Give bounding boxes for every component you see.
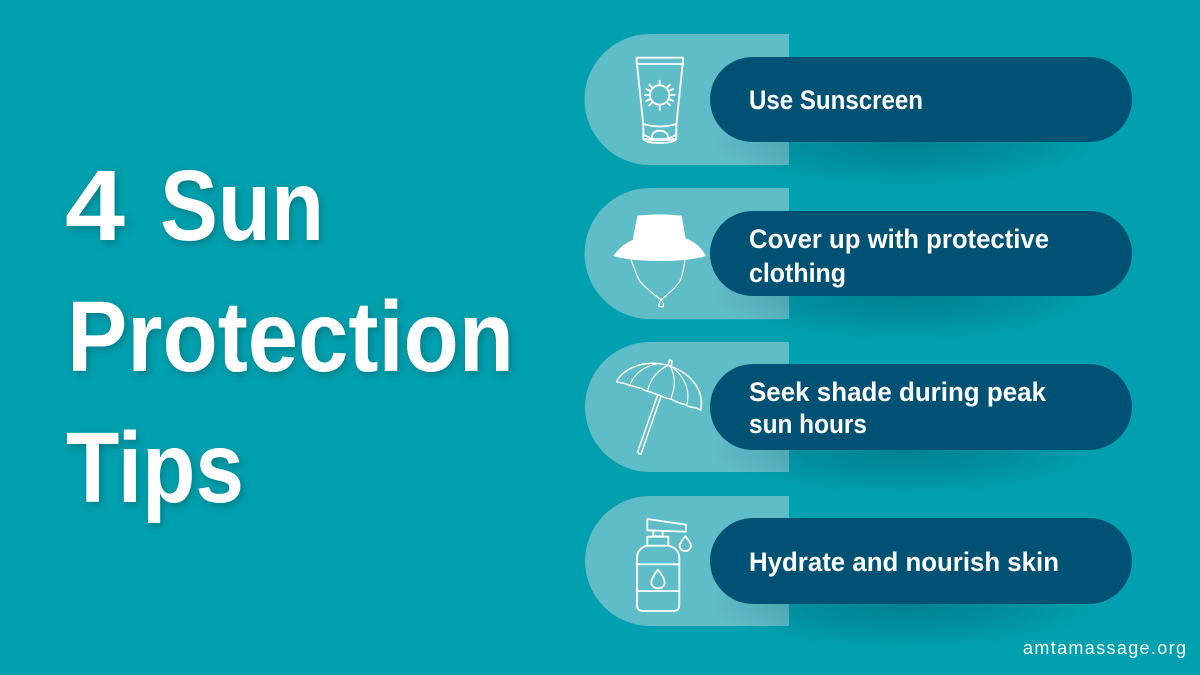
panel: use sunscreen	[584, 34, 1132, 186]
pill shadow	[710, 560, 1100, 648]
icon panel background	[584, 34, 789, 165]
title: 4	[65, 150, 125, 262]
footer url: amtamassage.org	[1023, 638, 1186, 658]
title: Sun	[160, 150, 324, 262]
pill: use sunscreen	[710, 57, 1132, 142]
pill shadow	[710, 252, 1100, 340]
icon panel background	[585, 496, 789, 626]
label: seek shade: sun hours	[749, 409, 867, 439]
label: use sunscreen: Use Sunscreen	[749, 85, 923, 115]
icon panel background	[584, 188, 789, 319]
title: Tips	[66, 412, 244, 524]
pill: seek shade	[710, 364, 1132, 450]
pill shadow	[710, 98, 1100, 186]
pill shadow	[710, 406, 1100, 494]
pill: hydrate	[710, 518, 1132, 604]
title	[65, 150, 514, 524]
panel: protective clothing	[584, 188, 1132, 340]
icon: sunscreen tube	[637, 58, 683, 143]
label: protective clothing: Cover up with protective	[749, 224, 1049, 254]
label: protective clothing: clothing	[749, 258, 846, 288]
panel: seek shade	[585, 342, 1132, 494]
label: hydrate: Hydrate and nourish skin	[749, 547, 1059, 577]
icon panel background	[585, 342, 789, 472]
icon: lotion bottle	[637, 519, 691, 611]
icon: umbrella	[617, 360, 701, 454]
panel: hydrate	[585, 496, 1132, 648]
label: seek shade	[749, 377, 1047, 439]
icon: sun hat	[613, 214, 706, 307]
title: Protection	[67, 281, 514, 393]
pill: protective clothing	[710, 211, 1132, 296]
label: seek shade: Seek shade during peak	[749, 377, 1047, 407]
label: protective clothing	[749, 224, 1049, 288]
